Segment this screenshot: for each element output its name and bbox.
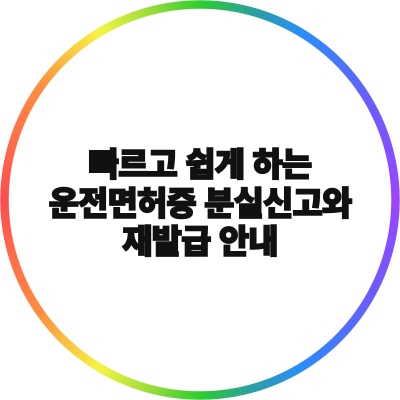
- title: [49, 146, 352, 260]
- title: 재발급 안내: [122, 223, 278, 260]
- title: 빠르고 쉽게 하는: [89, 146, 311, 183]
- title: 운전면허증 분실신고와: [49, 184, 351, 222]
